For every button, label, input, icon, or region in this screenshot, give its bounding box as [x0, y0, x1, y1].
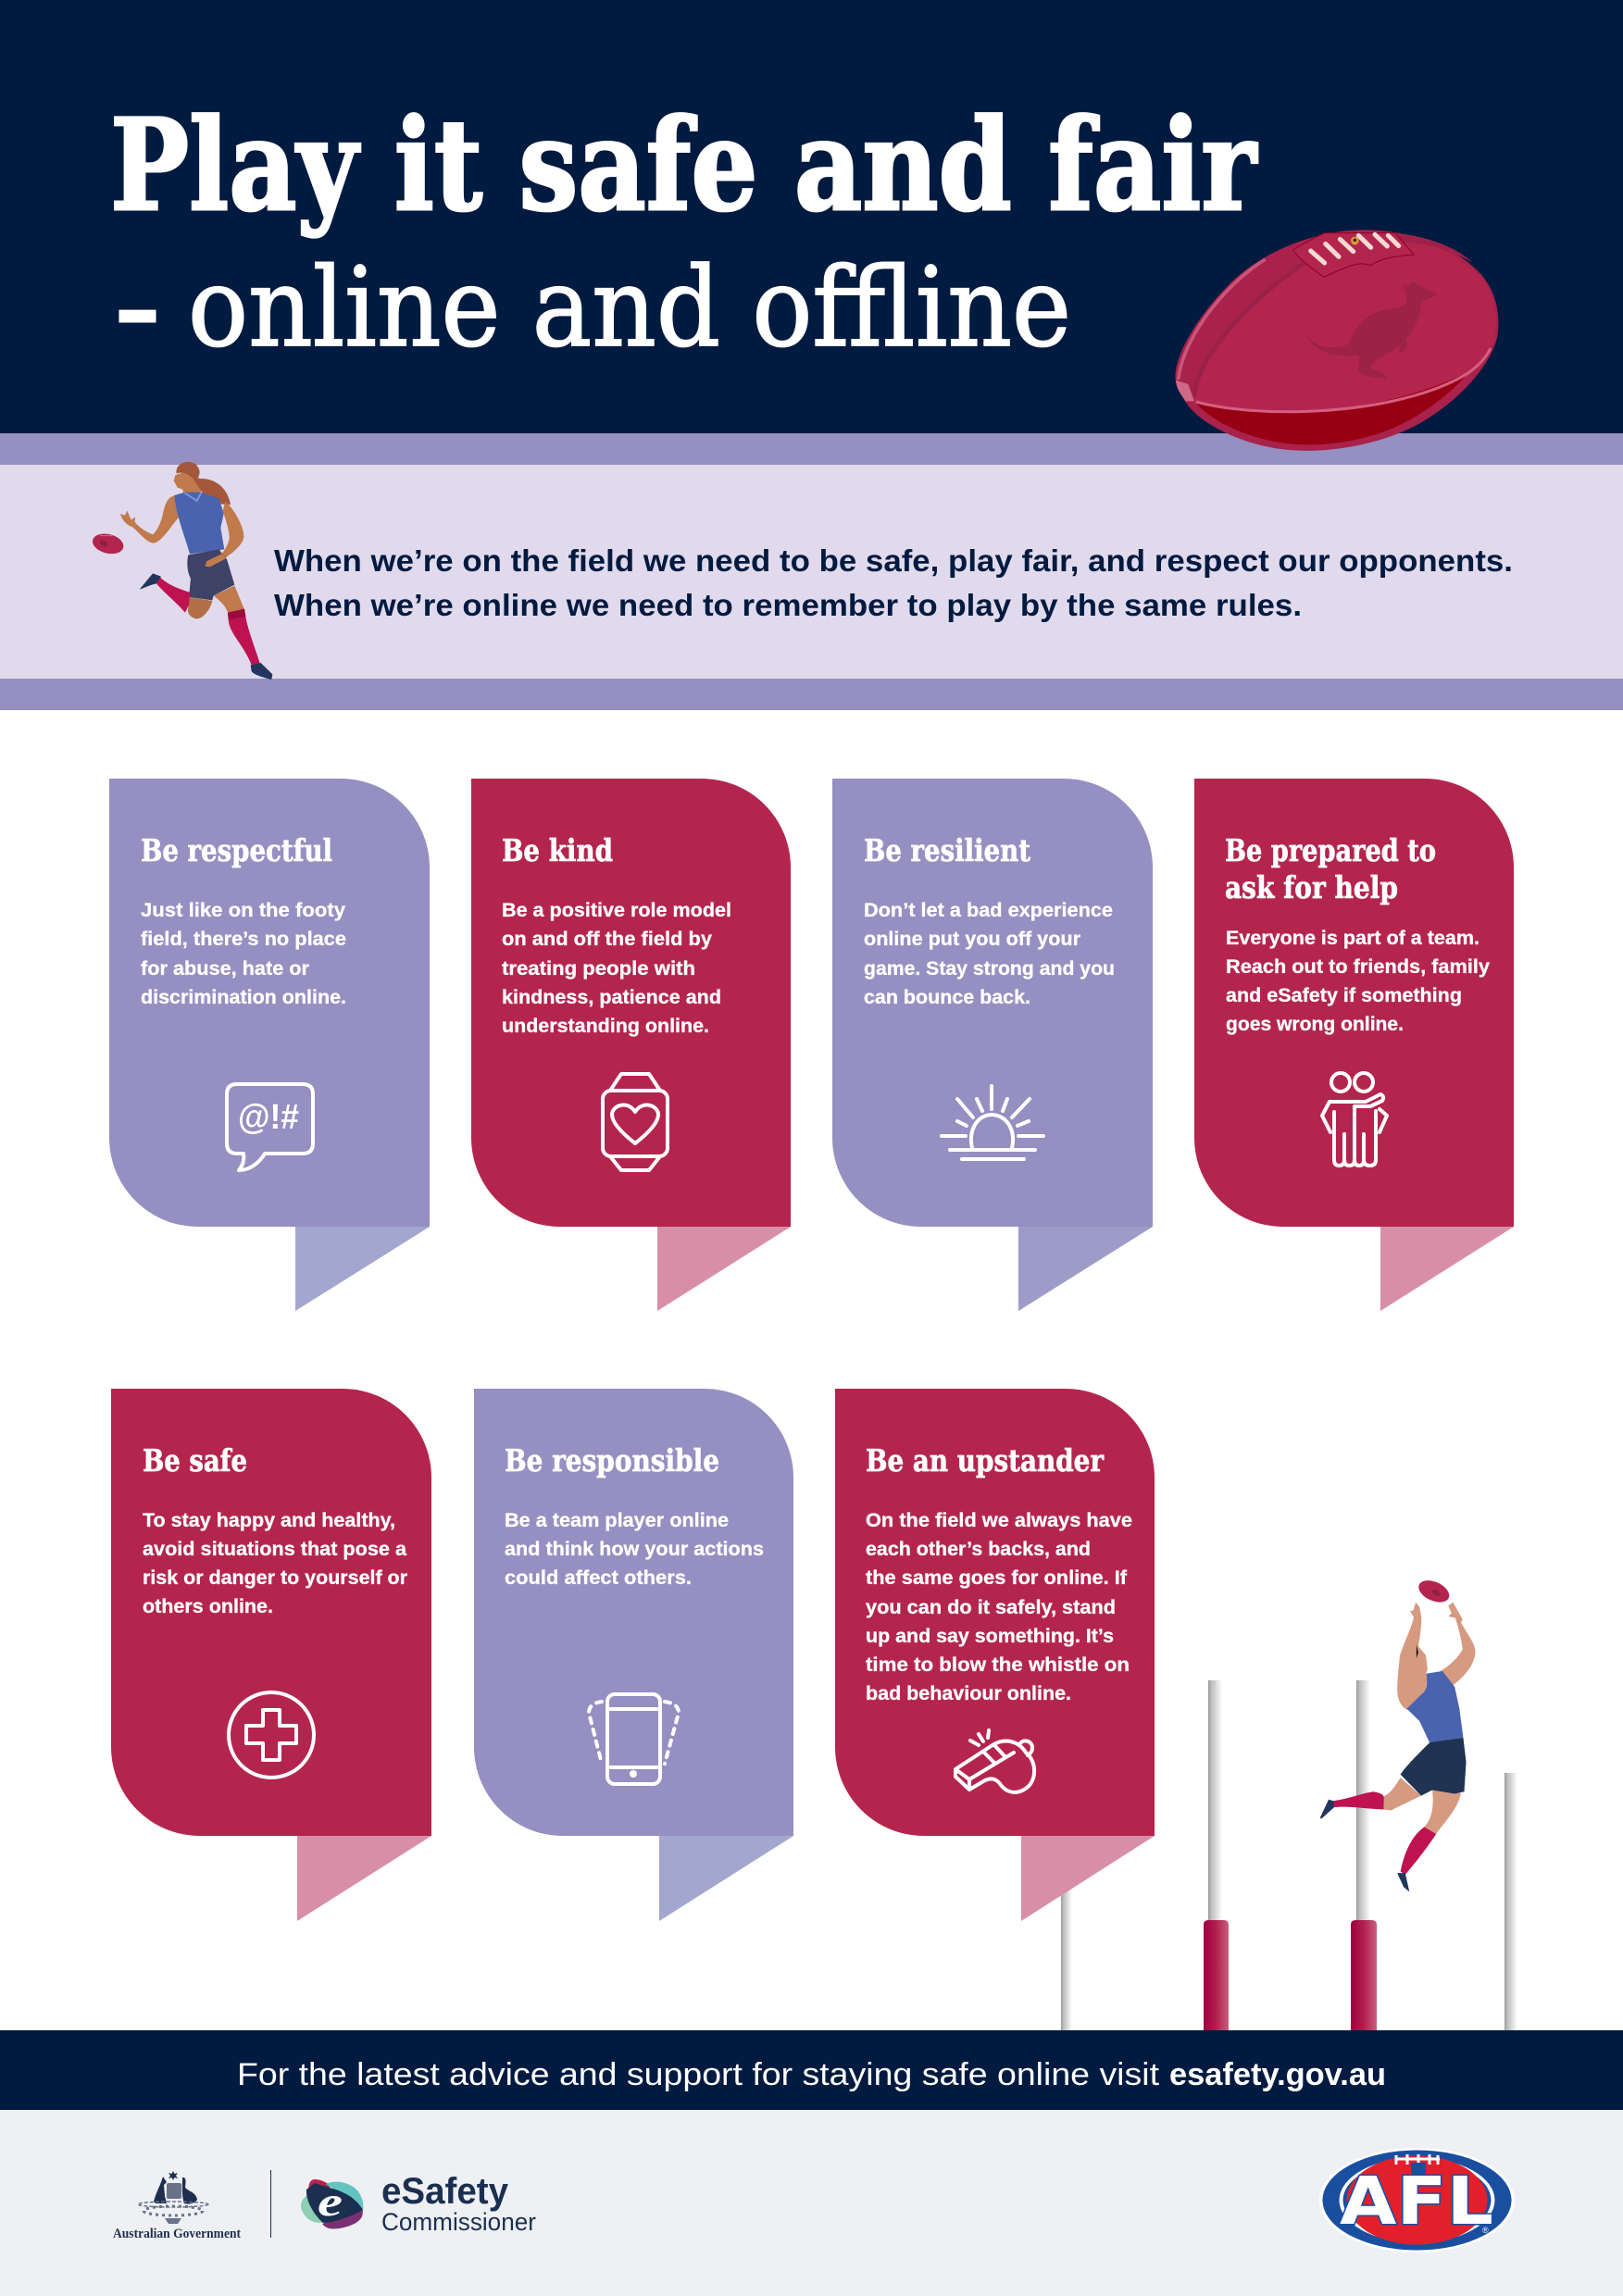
eSafety Commissioner wordmark: Commissioner: [381, 2208, 536, 2236]
icon: medical cross: [229, 1692, 314, 1778]
body text: discrimination online.: [141, 986, 346, 1008]
body text: others online.: [143, 1595, 273, 1617]
body text: field, there’s no place: [141, 928, 346, 950]
body text: up and say something. It’s: [866, 1625, 1114, 1647]
body text: [1226, 927, 1490, 1035]
small ball: [91, 530, 126, 556]
lace patch: [1293, 233, 1414, 277]
intro text: [274, 544, 1513, 623]
football illustration: [1175, 230, 1498, 451]
body text: on and off the field by: [502, 928, 712, 950]
body text: Everyone is part of a team.: [1226, 927, 1479, 949]
body text: Reach out to friends, family: [1226, 955, 1490, 978]
body text: [143, 1509, 408, 1617]
small ball: [1415, 1576, 1453, 1606]
intro text: When we’re online we need to remember to play by the same rules.: [274, 589, 1302, 623]
advice strip: [0, 2030, 1623, 2110]
website link text: esafety.gov.au: [1169, 2057, 1386, 2092]
body text: online put you off your: [864, 928, 1081, 950]
body text: [502, 899, 731, 1037]
heading: [1225, 832, 1436, 905]
body text: and think how your actions: [505, 1538, 764, 1560]
intro band: [0, 433, 1623, 710]
card: Be prepared to ask for help: [1194, 779, 1514, 1311]
icon: whistle: [955, 1730, 1034, 1792]
body text: avoid situations that pose a: [143, 1538, 407, 1560]
AFL logo: [1319, 2148, 1515, 2252]
body text: time to blow the whistle on: [866, 1653, 1130, 1676]
card tail: [657, 1227, 791, 1311]
body text: [866, 1509, 1132, 1704]
body text: [505, 1509, 764, 1589]
heading: Be kind: [502, 832, 613, 868]
eSafety logo mark: e: [318, 2179, 343, 2225]
body text: On the field we always have: [866, 1509, 1132, 1531]
body text: each other’s backs, and: [866, 1538, 1091, 1560]
card tail: [295, 1227, 430, 1311]
footer logos panel: [0, 2110, 1623, 2296]
heading: Be responsible: [505, 1442, 719, 1479]
icon: two people: [1322, 1073, 1387, 1166]
heading: Be prepared to: [1225, 832, 1436, 868]
icon: sunrise: [942, 1086, 1043, 1159]
Australian Government wordmark: Australian Government: [113, 2227, 241, 2241]
eSafety logo mark: [301, 2179, 363, 2229]
card tail: [1021, 1836, 1155, 1921]
heading: Be resilient: [864, 832, 1031, 868]
Australian Government crest: [138, 2171, 208, 2224]
body text: you can do it safely, stand: [866, 1596, 1116, 1618]
icon: vibrating phone: [589, 1694, 679, 1784]
runner illustration: [91, 462, 272, 680]
heading: Be safe: [143, 1442, 247, 1479]
card tail: [1380, 1227, 1514, 1311]
body text: To stay happy and healthy,: [143, 1509, 395, 1531]
goal posts: [1061, 1680, 1517, 2030]
body text: Be a team player online: [505, 1509, 729, 1531]
heading: Be an upstander: [866, 1442, 1105, 1479]
card tail: [297, 1836, 431, 1921]
card: Be safe: [111, 1389, 431, 1921]
body text: could affect others.: [505, 1566, 692, 1589]
body text: goes wrong online.: [1226, 1013, 1404, 1035]
AFL logo: AFL: [1340, 2163, 1493, 2240]
body text: and eSafety if something: [1226, 984, 1462, 1006]
heading: Be respectful: [141, 832, 332, 868]
card tail: [1018, 1227, 1153, 1311]
logo divider: [270, 2170, 272, 2238]
jumping player illustration: [1320, 1576, 1476, 1891]
card tail: [659, 1836, 793, 1921]
body text: kindness, patience and: [502, 986, 721, 1008]
body text: treating people with: [502, 957, 695, 980]
title line 1: Play it safe and fair: [110, 92, 1258, 240]
icon: speech bubble: [227, 1084, 313, 1170]
body text: [864, 899, 1115, 1008]
card: Be an upstander: [835, 1389, 1155, 1921]
body text: understanding online.: [502, 1015, 709, 1037]
body text: Don’t let a bad experience: [864, 899, 1113, 921]
body text: can bounce back.: [864, 986, 1030, 1008]
card: Be kind: [471, 779, 791, 1311]
eSafety Commissioner wordmark: [381, 2171, 536, 2236]
body text: Be a positive role model: [502, 899, 731, 921]
body text: Just like on the footy: [141, 899, 345, 921]
body text: for abuse, hate or: [141, 957, 310, 980]
body text: the same goes for online. If: [866, 1566, 1128, 1589]
header panel: [0, 0, 1623, 433]
intro text: When we’re on the field we need to be safe, play fair, and respect our opponents.: [274, 544, 1513, 579]
body text: risk or danger to yourself or: [143, 1566, 408, 1589]
card: Be respectful: [109, 779, 430, 1311]
advice text: For the latest advice and support for staying safe online visit: [237, 2057, 1160, 2092]
card: Be responsible: [474, 1389, 793, 1921]
title line 2: –: [114, 243, 161, 371]
title line 2: online and offline: [188, 243, 1071, 371]
AFL logo: ®: [1482, 2226, 1489, 2235]
body text: game. Stay strong and you: [864, 957, 1115, 980]
card: Be resilient: [832, 779, 1153, 1311]
icon: smartwatch heart: [603, 1074, 668, 1170]
kangaroo emblem: [1305, 281, 1437, 379]
body text: bad behaviour online.: [866, 1682, 1071, 1704]
heading: ask for help: [1225, 869, 1398, 905]
post pads: [1204, 1920, 1377, 2030]
eSafety Commissioner wordmark: eSafety: [381, 2171, 509, 2212]
body text: [141, 899, 346, 1008]
icon: speech bubble: @!#: [238, 1098, 299, 1137]
